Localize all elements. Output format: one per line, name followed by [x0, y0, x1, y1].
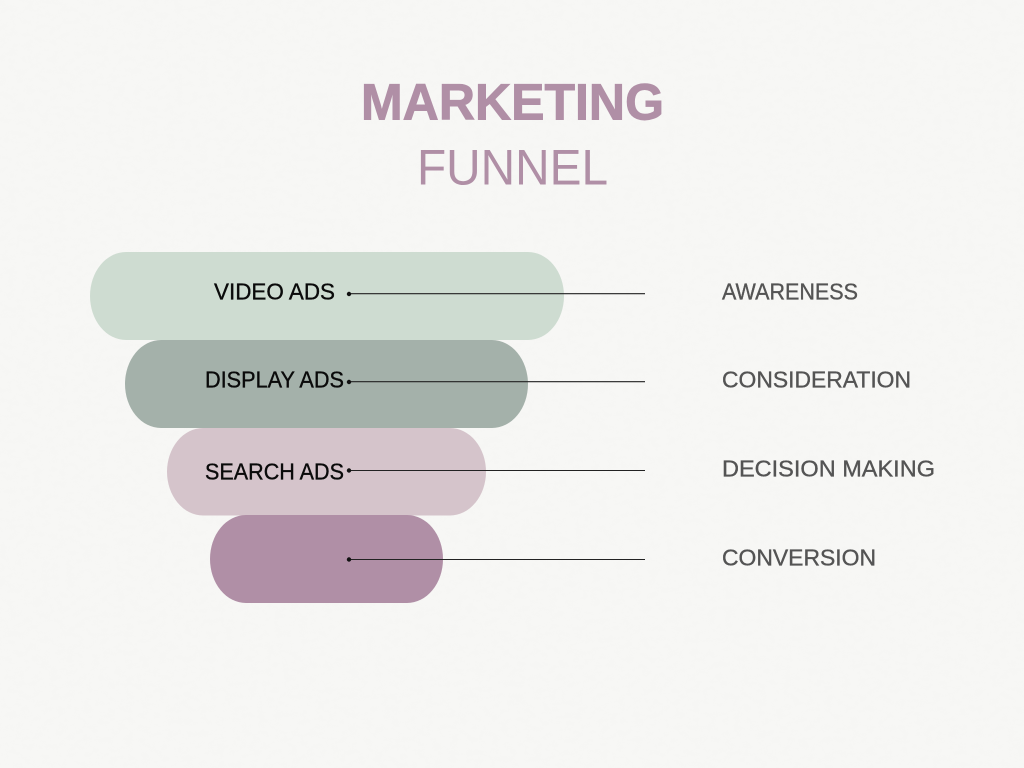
funnel band: conversion [210, 515, 443, 603]
title line: marketing: MARKETING [361, 74, 664, 130]
connector: search ads to decision making [347, 468, 645, 473]
funnel chart [90, 252, 564, 603]
funnel band: search ads [167, 428, 486, 516]
connector: video ads to awareness [347, 292, 645, 296]
funnel band: display ads: DISPLAY ADS [205, 366, 344, 392]
funnel band: video ads: VIDEO ADS [214, 278, 335, 304]
funnel band: display ads [125, 340, 528, 428]
stage labels [722, 278, 935, 570]
connector: display ads to consideration [347, 380, 645, 384]
stage label: awareness: AWARENESS [722, 278, 858, 304]
stage label: consideration: CONSIDERATION [722, 366, 911, 392]
stage label: conversion: CONVERSION [722, 544, 876, 570]
funnel band: video ads [90, 252, 564, 340]
stage label: decision making: DECISION MAKING [722, 455, 935, 481]
funnel band: search ads: SEARCH ADS [205, 458, 344, 484]
title [361, 74, 664, 196]
connector: conversion band to conversion [347, 557, 645, 562]
title line: funnel: FUNNEL [417, 140, 608, 196]
